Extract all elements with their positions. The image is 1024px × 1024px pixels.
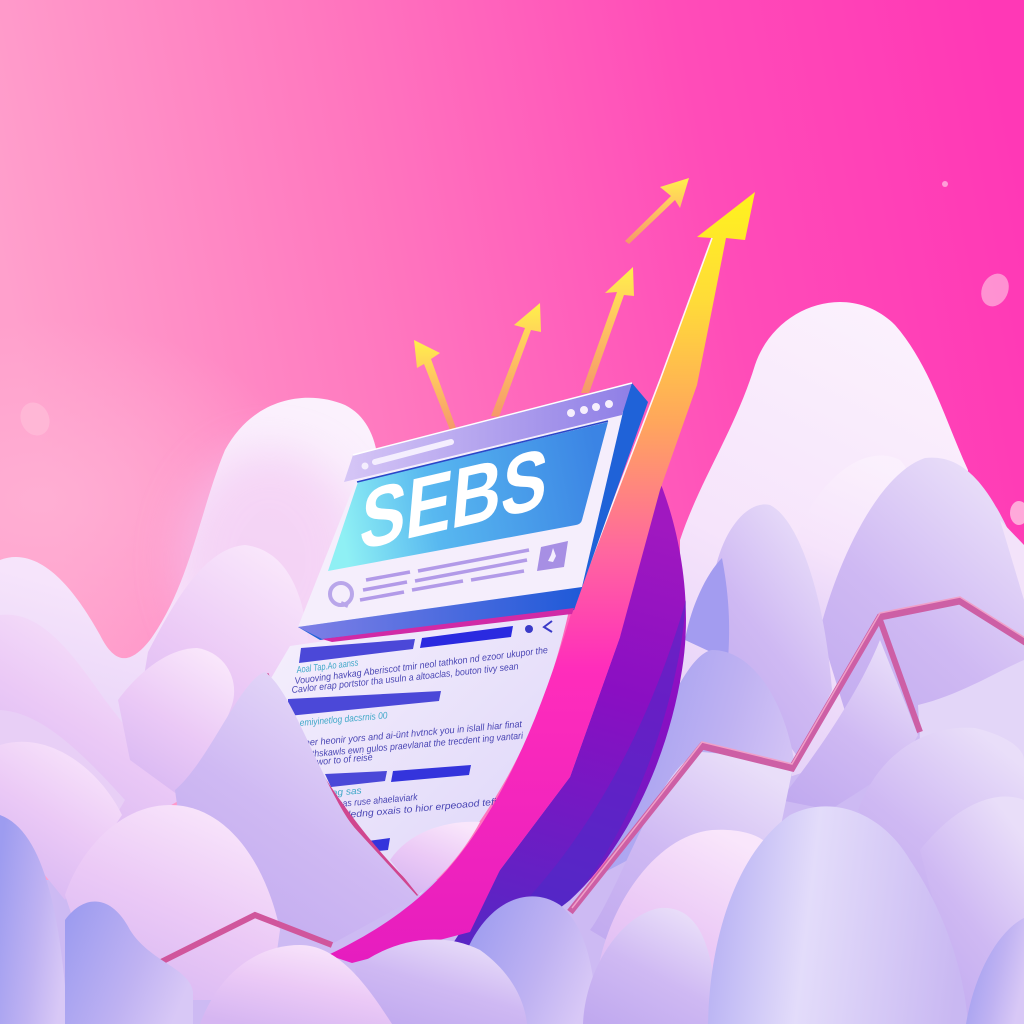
hill: right periwinkle	[820, 458, 1024, 760]
hill: centre lavender	[590, 752, 792, 960]
hill: under zigzag triangle	[780, 640, 918, 810]
hill: right lower	[920, 797, 1024, 1024]
paragraph 3: pas ruse ahaelaviark	[336, 792, 419, 810]
hill: right large white	[680, 302, 968, 800]
hill: foreground large	[708, 806, 968, 1024]
teal heading 1: Aoal Tap.Ao aanss	[295, 657, 359, 676]
hill: left low	[0, 710, 125, 860]
front hills	[0, 672, 1024, 1024]
paragraph 1 line 2: Cavlor erap portstor tha usuln a altoaclas, bouton tivy sean	[291, 661, 519, 696]
teal heading 3: ag sas	[331, 785, 362, 799]
decorative droplets	[15, 181, 1024, 607]
side dark inner shade	[480, 600, 686, 943]
main growth arrow side	[450, 440, 686, 948]
bar row 1 b	[420, 626, 513, 648]
window dots	[567, 400, 613, 417]
paragraph 3 line 2: dedng oxais to hior erpeoaod tefi	[344, 797, 498, 821]
page text and bars	[288, 621, 552, 852]
window bottom band	[298, 587, 582, 639]
hill: right shoulder	[858, 728, 1024, 950]
browser window	[298, 383, 648, 642]
page: article sheet	[270, 606, 570, 895]
paragraph 2 line 2: thskawls ewn gulos praevlanat the trecdent ing vantari	[311, 730, 524, 760]
white panel	[298, 412, 623, 627]
hill: right light	[918, 660, 1024, 770]
headline SEBS: SEBS	[356, 429, 552, 568]
zigzag line: lower left	[155, 915, 332, 965]
window side	[298, 383, 648, 640]
hill: small behind page	[390, 822, 480, 895]
right text lines	[412, 550, 529, 590]
arrow 2	[491, 303, 541, 417]
hill: left peak	[175, 672, 418, 945]
bar row 4	[360, 838, 390, 852]
base ground	[0, 700, 1024, 1024]
hill: lower middle	[590, 830, 770, 1024]
arrow 3	[581, 267, 634, 393]
chevron	[544, 621, 552, 632]
hill: foreground right edge	[966, 918, 1024, 1024]
hill: right narrow	[715, 504, 832, 760]
back hills	[0, 302, 1024, 1024]
hill: left middle	[130, 545, 308, 780]
bar row 1	[299, 639, 415, 663]
pink under band	[322, 608, 574, 642]
address dot	[362, 462, 368, 470]
blue screen	[328, 422, 608, 571]
bar top highlight	[353, 383, 632, 455]
hill: bottom centre B	[355, 940, 527, 1024]
paragraph 1: Vouoving havkag Aberiscot tmir neol tathkon nd ezoor ukupor the	[294, 645, 548, 687]
bar row 3 b	[391, 765, 471, 782]
hill: right mid small	[790, 456, 913, 640]
bar row 3	[325, 771, 387, 787]
hill: blue narrow	[685, 558, 729, 660]
bar row 2	[288, 691, 441, 716]
arrow 1	[414, 340, 456, 430]
teal heading 2: emiyinetlog dacsrnis 00	[299, 710, 389, 729]
hill: blue centre	[600, 650, 794, 930]
hill: left large white	[0, 398, 420, 800]
icon dot	[525, 625, 533, 633]
screen top edge	[357, 421, 608, 482]
search icon	[330, 583, 352, 606]
hill: bottom centre A	[468, 896, 597, 1024]
hill: left big rounded	[65, 805, 280, 1000]
hill: left rounded	[118, 648, 234, 795]
paragraph 2 line 3: wor to of reise	[316, 752, 373, 768]
hill: bottom left blue	[65, 902, 193, 1024]
hill: far left blue	[0, 815, 68, 1024]
paragraph 2: her heonir yors and ai-ünt hvtnck you in islall hiar finat	[304, 719, 523, 749]
hill: bottom centre C	[200, 945, 392, 1024]
left text lines	[360, 572, 410, 600]
hill: right edge	[1000, 520, 1024, 600]
download button	[537, 541, 568, 571]
curved edge line along page	[266, 674, 418, 895]
hill: bottom centre D	[583, 908, 716, 1024]
left hill shading	[180, 450, 360, 670]
arrow 4	[625, 178, 689, 244]
hill: far left	[0, 615, 180, 840]
zigzag line: right	[570, 597, 1024, 912]
arrow edge highlight	[573, 238, 712, 607]
top bar	[344, 383, 632, 482]
small upward arrows	[414, 178, 689, 430]
main growth arrow front	[328, 192, 755, 963]
address pill	[375, 442, 451, 462]
download glyph	[548, 548, 556, 562]
hill: left rounded back	[0, 742, 122, 900]
